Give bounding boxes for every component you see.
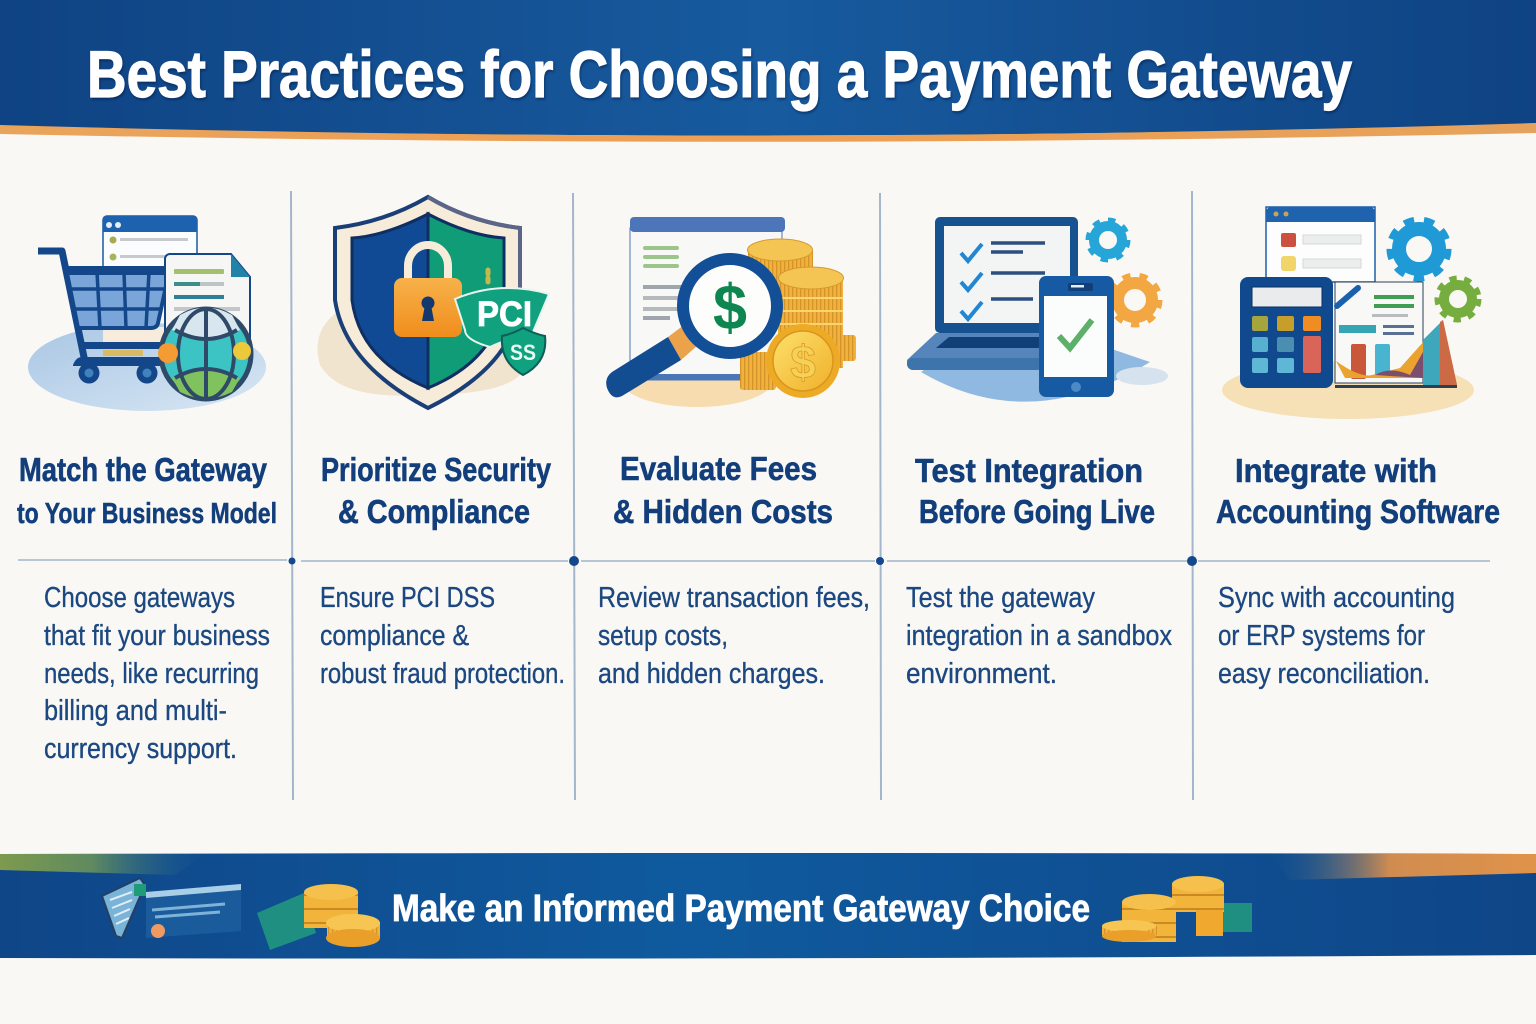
- body text: integrate with accounting: Sync with accounting: [1218, 582, 1455, 614]
- icon: magnifier, invoice and coins: [606, 217, 856, 407]
- body text: match the gateway: needs, like recurring: [44, 658, 259, 690]
- icon: shield, lock and PCI badge: PCI: [477, 295, 532, 334]
- column dividers: [18, 191, 1490, 800]
- heading: test integration: Before Going Live: [919, 493, 1155, 530]
- panel: test integration: [906, 217, 1172, 690]
- heading: evaluate fees: Evaluate Fees: [620, 450, 817, 487]
- body text: prioritize security: robust fraud protection.: [320, 658, 565, 690]
- body text: integrate with accounting: [1218, 582, 1455, 690]
- body text: test integration: integration in a sandbox: [906, 620, 1172, 652]
- body text: match the gateway: that fit your business: [44, 620, 270, 652]
- body text: prioritize security: Ensure PCI DSS: [320, 582, 495, 614]
- footer icons: coin stacks and envelope: [1102, 876, 1252, 942]
- heading: integrate with accounting: [1216, 452, 1500, 530]
- heading: prioritize security: [321, 451, 552, 530]
- heading: prioritize security: & Compliance: [338, 493, 530, 530]
- heading: match the gateway: Match the Gateway: [19, 451, 268, 488]
- body text: evaluate fees: Review transaction fees,: [598, 582, 870, 614]
- heading: match the gateway: to Your Business Model: [17, 498, 277, 530]
- heading: test integration: Test Integration: [915, 452, 1143, 489]
- heading: evaluate fees: & Hidden Costs: [613, 493, 833, 530]
- body text: match the gateway: [44, 582, 270, 765]
- body text: test integration: [906, 582, 1172, 690]
- body text: test integration: environment.: [906, 658, 1057, 690]
- icon: laptop, phone and gears: [907, 217, 1168, 402]
- icon: magnifier, invoice and coins: $: [713, 271, 747, 343]
- body text: match the gateway: currency support.: [44, 733, 237, 765]
- body text: integrate with accounting: or ERP systems for: [1218, 620, 1425, 652]
- body text: evaluate fees: setup costs,: [598, 620, 728, 652]
- panel: match the gateway: [17, 216, 277, 765]
- footer message: Make an Informed Payment Gateway Choice: [392, 888, 1090, 930]
- body text: test integration: Test the gateway: [906, 582, 1095, 614]
- header band: [0, 0, 1536, 142]
- body text: evaluate fees: [598, 582, 870, 690]
- body text: prioritize security: [320, 582, 565, 690]
- heading: match the gateway: [17, 451, 277, 530]
- panel: prioritize security: [318, 197, 565, 690]
- panel: evaluate fees: [598, 217, 870, 690]
- icon: shopping cart, documents and globe: [28, 216, 266, 411]
- heading: prioritize security: Prioritize Security: [321, 451, 552, 488]
- icon: calculator, report and gears: [1222, 207, 1478, 419]
- body text: match the gateway: billing and multi-: [44, 695, 227, 727]
- divider dots: [288, 556, 1197, 566]
- panel: integrate with accounting: [1216, 207, 1500, 690]
- icon: magnifier, invoice and coins: $: [790, 336, 816, 388]
- body text: match the gateway: Choose gateways: [44, 582, 235, 614]
- heading: integrate with accounting: Integrate with: [1235, 452, 1437, 489]
- body text: prioritize security: compliance &: [320, 620, 469, 652]
- heading: test integration: [915, 452, 1155, 530]
- body text: evaluate fees: and hidden charges.: [598, 658, 825, 690]
- body text: integrate with accounting: easy reconciliation.: [1218, 658, 1430, 690]
- footer icons: cards and envelope with coins: [102, 878, 380, 950]
- footer band: [0, 853, 1536, 959]
- icon: shield, lock and PCI badge: [318, 197, 549, 408]
- heading: evaluate fees: [613, 450, 833, 530]
- icon: shield, lock and PCI badge: SS: [510, 340, 536, 365]
